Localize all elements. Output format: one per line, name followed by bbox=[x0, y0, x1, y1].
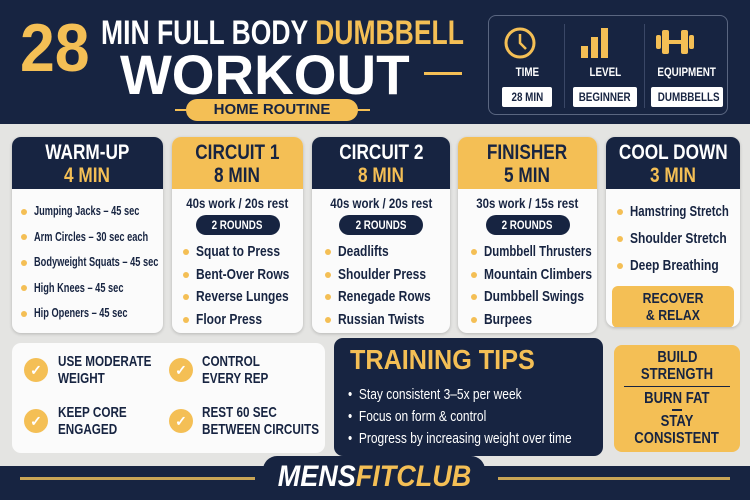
stat: time bbox=[502, 65, 552, 107]
panel: finisher: Burpees bbox=[484, 310, 532, 328]
panel: checklist: REST 60 SEC bbox=[202, 404, 277, 421]
panel: motivation bbox=[614, 345, 740, 452]
stat: level bbox=[573, 65, 637, 107]
panel: cool down: Hamstring Stretch bbox=[630, 203, 729, 220]
stat: equipment bbox=[651, 65, 723, 107]
panel: checklist: ✓ bbox=[175, 362, 187, 378]
panel: checklist: BETWEEN CIRCUITS bbox=[202, 421, 319, 438]
panel: checklist: CONTROL bbox=[202, 353, 260, 370]
stat: equipment: EQUIPMENT bbox=[658, 65, 716, 79]
footer logo bbox=[263, 456, 485, 500]
panel: circuit 1: CIRCUIT 1 bbox=[195, 141, 280, 164]
callout: recover bbox=[612, 286, 734, 328]
title line 1: MIN FULL BODY DUMBBELL bbox=[101, 14, 464, 52]
panel: finisher: Mountain Climbers bbox=[484, 266, 592, 282]
panel: circuit 2: Renegade Rows bbox=[338, 288, 431, 305]
subtitle pill: HOME ROUTINE bbox=[214, 101, 330, 118]
panel: warm-up: 4 MIN bbox=[65, 164, 110, 187]
stat: level: LEVEL bbox=[589, 65, 621, 79]
panel: motivation: STRENGTH bbox=[641, 366, 713, 383]
callout: recover: & RELAX bbox=[646, 307, 700, 324]
panel: circuit 2: 8 MIN bbox=[358, 164, 404, 187]
header band bbox=[0, 0, 750, 124]
panel: circuit 1: Bent-Over Rows bbox=[196, 266, 289, 282]
panel: circuit 1 bbox=[172, 137, 303, 333]
panel: warm-up: Bodyweight Squats – 45 sec bbox=[34, 255, 158, 269]
panel: circuit 1: Squat to Press bbox=[196, 243, 280, 260]
footer bbox=[0, 466, 750, 500]
panel: cool down: 3 MIN bbox=[650, 164, 696, 187]
panel: motivation: CONSISTENT bbox=[635, 430, 719, 447]
panel: warm-up: High Knees – 45 sec bbox=[34, 280, 123, 294]
panel: circuit 2: Deadlifts bbox=[338, 243, 389, 260]
panel: motivation: BURN FAT bbox=[644, 390, 710, 407]
icon: dumbbell bbox=[656, 30, 694, 54]
panel: warm-up: WARM-UP bbox=[45, 141, 130, 164]
panel: checklist: KEEP CORE bbox=[58, 404, 127, 421]
footer logo: MENSFITCLUB bbox=[277, 460, 471, 493]
panel: cool down bbox=[606, 137, 740, 327]
panel: checklist: USE MODERATE bbox=[58, 353, 151, 370]
panel: circuit 2: CIRCUIT 2 bbox=[339, 141, 423, 164]
panel: warm-up bbox=[12, 137, 163, 333]
panel: training tips: • Focus on form & control bbox=[348, 408, 486, 425]
info box bbox=[488, 15, 728, 115]
stat: time: 28 MIN bbox=[511, 90, 543, 104]
panel: circuit 2: 2 ROUNDS bbox=[356, 218, 406, 232]
panel: training tips: • Progress by increasing weight over time bbox=[348, 430, 572, 447]
panel: motivation: BUILD bbox=[657, 349, 697, 366]
panel: checklist bbox=[12, 343, 325, 453]
panel: checklist: WEIGHT bbox=[58, 370, 105, 387]
panel: warm-up: Hip Openers – 45 sec bbox=[34, 306, 128, 320]
panel: finisher: 30s work / 15s rest bbox=[476, 195, 579, 211]
panel: checklist: ENGAGED bbox=[58, 421, 117, 438]
panel: training tips: TRAINING TIPS bbox=[350, 344, 535, 375]
panel: motivation: STAY bbox=[661, 413, 693, 430]
panel: finisher: Dumbbell Swings bbox=[484, 288, 584, 305]
panel: warm-up: Jumping Jacks – 45 sec bbox=[34, 204, 139, 218]
panel: circuit 1: 2 ROUNDS bbox=[212, 218, 263, 232]
panel: checklist: ✓ bbox=[30, 362, 42, 378]
panel: cool down: Shoulder Stretch bbox=[630, 230, 727, 247]
panel: finisher: 2 ROUNDS bbox=[502, 218, 553, 232]
panel: circuit 2: Russian Twists bbox=[338, 310, 424, 328]
panel: finisher bbox=[458, 137, 597, 333]
panel: finisher: Dumbbell Thrusters bbox=[484, 243, 592, 260]
panel: cool down: COOL DOWN bbox=[619, 141, 727, 164]
panel: checklist: EVERY REP bbox=[202, 370, 268, 387]
panel: training tips bbox=[334, 338, 603, 456]
stat: level: BEGINNER bbox=[579, 90, 631, 104]
panel: circuit 1: 40s work / 20s rest bbox=[186, 195, 289, 211]
icon: clock bbox=[504, 28, 536, 58]
panel: circuit 1: Reverse Lunges bbox=[196, 288, 289, 305]
panel: warm-up: Arm Circles – 30 sec each bbox=[34, 230, 148, 244]
stat: time: TIME bbox=[515, 65, 539, 79]
panel: cool down: Deep Breathing bbox=[630, 257, 719, 274]
icon: level bars bbox=[581, 28, 608, 58]
title number: 28 bbox=[20, 10, 90, 86]
panel: circuit 1: Floor Press bbox=[196, 310, 262, 328]
panel: checklist: ✓ bbox=[30, 413, 42, 429]
panel: finisher: FINISHER bbox=[487, 141, 568, 164]
stat: equipment: DUMBBELLS bbox=[658, 90, 720, 104]
panel: checklist: ✓ bbox=[175, 413, 187, 429]
panel: finisher: 5 MIN bbox=[505, 164, 550, 187]
panel: training tips: • Stay consistent 3–5x per week bbox=[348, 386, 522, 403]
panel: circuit 2: Shoulder Press bbox=[338, 266, 426, 282]
panel: circuit 1: 8 MIN bbox=[215, 164, 260, 187]
callout: recover: RECOVER bbox=[643, 290, 703, 307]
panel: circuit 2 bbox=[312, 137, 450, 333]
title WORKOUT: WORKOUT bbox=[120, 43, 410, 106]
panel: circuit 2: 40s work / 20s rest bbox=[330, 195, 432, 211]
